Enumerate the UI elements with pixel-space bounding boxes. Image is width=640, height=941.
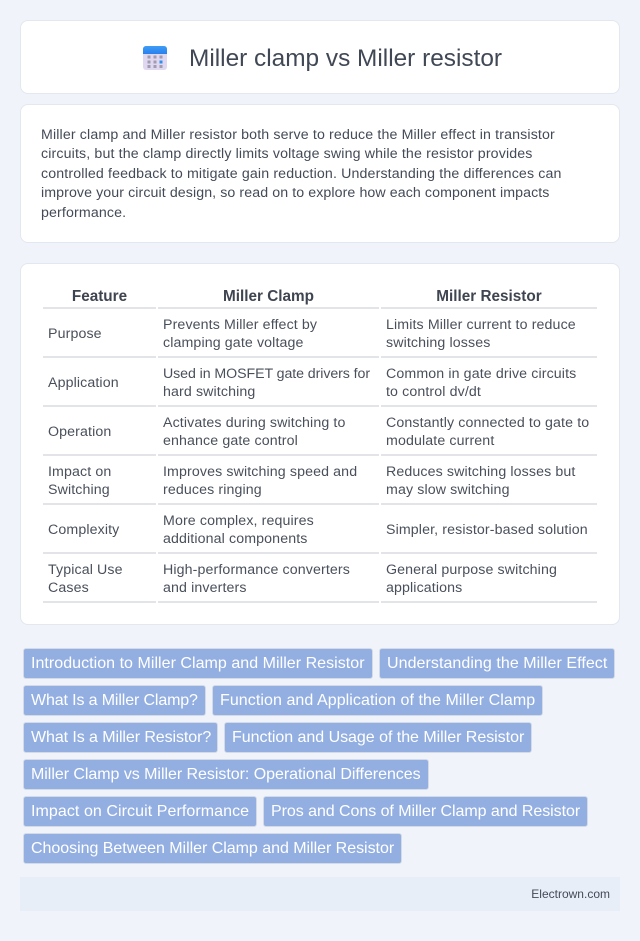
tag links bbox=[23, 648, 615, 864]
tag bbox=[224, 722, 532, 753]
panel: comparison table: Simpler, resistor-based solution bbox=[386, 522, 588, 538]
panel: comparison table: Common in gate drive circuits bbox=[386, 366, 576, 382]
panel: comparison table: Reduces switching losses but bbox=[386, 464, 575, 480]
panel: comparison table: enhance gate control bbox=[163, 433, 298, 449]
icon: calendar grid bbox=[143, 46, 167, 70]
panel: comparison table bbox=[20, 263, 620, 625]
panel: comparison table: Activates during switching to bbox=[163, 415, 346, 431]
tag bbox=[23, 648, 373, 679]
title: Miller clamp vs Miller resistor bbox=[189, 45, 502, 72]
panel: comparison table: to control dv/dt bbox=[386, 384, 481, 400]
panel: comparison table: Miller Resistor bbox=[436, 288, 542, 305]
panel: comparison table: Prevents Miller effect by bbox=[163, 317, 317, 333]
row: application: Application bbox=[48, 375, 119, 391]
tag: Function and Application of the Miller Clamp bbox=[220, 692, 535, 709]
panel: comparison table: Miller Clamp bbox=[223, 288, 314, 305]
panel: comparison table: Improves switching speed and bbox=[163, 464, 357, 480]
panel: comparison table: More complex, requires bbox=[163, 513, 314, 529]
tag: What Is a Miller Clamp? bbox=[31, 692, 198, 709]
panel: comparison table: additional components bbox=[163, 531, 308, 547]
tag bbox=[23, 833, 402, 864]
intro text: controlled feedback to mitigate gain reduction. Understanding the differences can bbox=[41, 166, 562, 182]
intro text: Miller clamp and Miller resistor both serve to reduce the Miller effect in transistor bbox=[41, 127, 555, 143]
panel: comparison table: and inverters bbox=[163, 580, 247, 596]
row: operation: Operation bbox=[48, 424, 111, 440]
row: complexity: Complexity bbox=[48, 522, 119, 538]
tag bbox=[379, 648, 615, 679]
panel: comparison table: hard switching bbox=[163, 384, 255, 400]
footer bbox=[20, 877, 620, 911]
panel: introduction bbox=[20, 104, 620, 243]
panel: comparison table: Used in MOSFET gate drivers for bbox=[163, 366, 370, 382]
tag: Miller Clamp vs Miller Resistor: Operational Differences bbox=[31, 766, 421, 783]
row: purpose: Purpose bbox=[48, 326, 102, 342]
intro text: circuits, but the clamp directly limits voltage swing while the resistor provides bbox=[41, 146, 533, 162]
intro text: improve your circuit design, so read on to explore how each component impacts bbox=[41, 185, 549, 201]
panel: comparison table: High-performance converters bbox=[163, 562, 350, 578]
panel: comparison table: switching losses bbox=[386, 335, 490, 351]
intro text: performance. bbox=[41, 205, 126, 221]
panel: comparison table: Constantly connected to gate to bbox=[386, 415, 589, 431]
panel: comparison table: modulate current bbox=[386, 433, 494, 449]
tag: Impact on Circuit Performance bbox=[31, 803, 249, 820]
panel: title header bbox=[20, 20, 620, 94]
row: typical use cases bbox=[48, 562, 123, 596]
tag: Choosing Between Miller Clamp and Miller Resistor bbox=[31, 840, 394, 857]
tag: Introduction to Miller Clamp and Miller Resistor bbox=[31, 655, 365, 672]
tag bbox=[23, 722, 218, 753]
tag bbox=[212, 685, 543, 716]
row: impact on switching bbox=[48, 464, 111, 498]
tag: Pros and Cons of Miller Clamp and Resistor bbox=[271, 803, 580, 820]
row: impact on switching: Switching bbox=[48, 482, 110, 498]
panel: comparison table: may slow switching bbox=[386, 482, 510, 498]
tag bbox=[23, 759, 429, 790]
tag bbox=[23, 796, 257, 827]
panel: comparison table: reduces ringing bbox=[163, 482, 262, 498]
intro text bbox=[41, 127, 562, 221]
table header: Feature bbox=[72, 288, 127, 305]
row: typical use cases: Cases bbox=[48, 580, 89, 596]
panel: comparison table: clamping gate voltage bbox=[163, 335, 304, 351]
row: typical use cases: Typical Use bbox=[48, 562, 123, 578]
tag bbox=[263, 796, 588, 827]
footer credit: Electrown.com bbox=[531, 887, 610, 901]
tag: Understanding the Miller Effect bbox=[387, 655, 607, 672]
panel: comparison table: Limits Miller current to reduce bbox=[386, 317, 576, 333]
tag: What Is a Miller Resistor? bbox=[31, 729, 211, 746]
tag bbox=[23, 685, 206, 716]
panel: comparison table: applications bbox=[386, 580, 462, 596]
tag: Function and Usage of the Miller Resistor bbox=[232, 729, 524, 746]
row: impact on switching: Impact on bbox=[48, 464, 111, 480]
panel: comparison table: General purpose switching bbox=[386, 562, 557, 578]
